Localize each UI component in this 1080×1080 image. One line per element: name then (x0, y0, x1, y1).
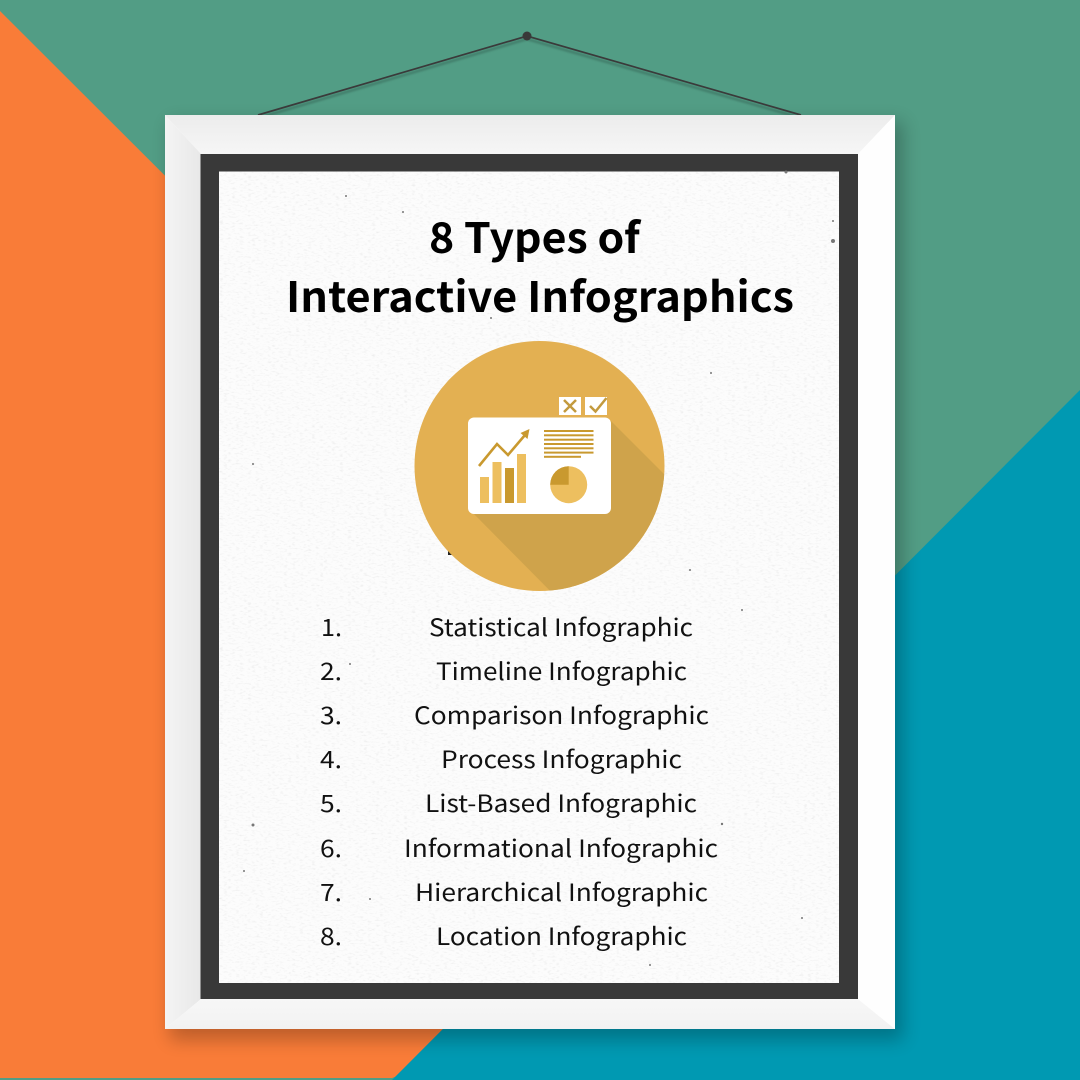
list item 1: Statistical Infographic (429, 608, 693, 643)
list item 5 (320, 784, 697, 819)
list item 4: Process Infographic (441, 740, 682, 775)
background: teal triangle (392, 390, 1080, 1080)
list item 6: Informational Infographic (404, 829, 718, 864)
list item 6: 6. (320, 829, 342, 864)
icon: text lines (544, 430, 594, 458)
list item 5: 5. (320, 784, 342, 819)
list item 8: Location Infographic (436, 917, 687, 952)
list item 8: 8. (320, 917, 342, 952)
list item 2: Timeline Infographic (436, 652, 687, 687)
list item 7: 7. (320, 873, 342, 908)
icon: circle background (414, 341, 664, 591)
icon: check box (585, 397, 607, 415)
list item 8 (320, 917, 687, 952)
list item 3: Comparison Infographic (414, 696, 709, 731)
background: orange triangle (0, 11, 600, 1078)
icon: long shadow (474, 418, 664, 590)
icon: trend arrow (479, 429, 530, 466)
list item 1 (321, 608, 693, 643)
icon: cross box (559, 397, 581, 415)
list item 4: 4. (320, 740, 342, 775)
list item 3: 3. (320, 696, 342, 731)
picture frame (165, 115, 895, 1029)
title (286, 205, 794, 325)
icon: dashboard card (468, 418, 611, 514)
list item 5: List-Based Infographic (425, 784, 697, 819)
numbered list (320, 608, 718, 952)
list item 1: 1. (321, 608, 342, 643)
list item 7: Hierarchical Infographic (415, 873, 708, 908)
icon: bar chart (480, 454, 526, 503)
list item 2: 2. (320, 652, 342, 687)
stray mark (448, 551, 453, 555)
icon: dashboard badge (414, 341, 664, 591)
hanging wire (258, 32, 801, 118)
title: Interactive Infographics (286, 264, 794, 325)
icon: pie chart (550, 466, 587, 503)
list item 7 (320, 873, 708, 908)
list item 4 (320, 740, 682, 775)
list item 2 (320, 652, 687, 687)
title: 8 Types of (429, 205, 641, 266)
frame drop shadow (170, 122, 903, 1040)
list item 3 (320, 696, 709, 731)
paper panel (219, 170, 839, 983)
